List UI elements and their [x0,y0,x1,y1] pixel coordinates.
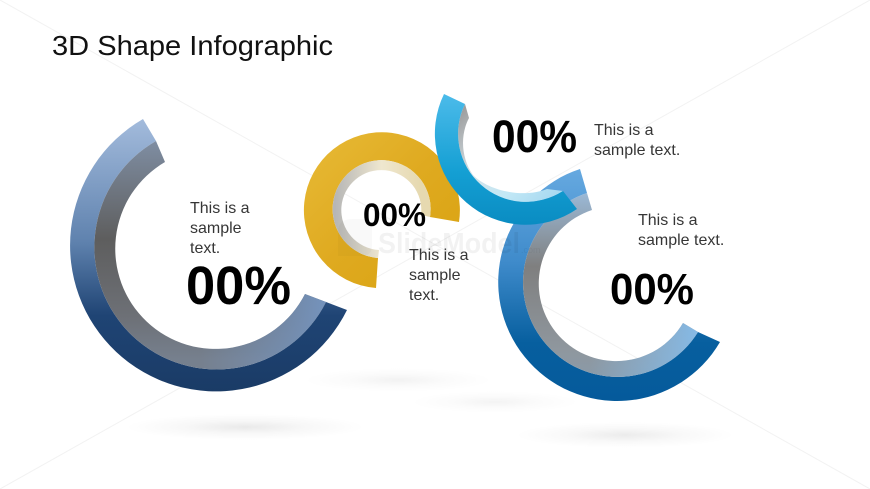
text block: cyan ring: This is a [594,122,654,139]
text block: navy ring: This is a [190,200,250,217]
cyan ring front face [435,94,577,225]
text block: blue ring [610,212,724,314]
panel: navy ring [70,119,347,391]
gold ring front face [304,132,460,288]
watermark [338,219,541,260]
title: 3D Shape Infographic [52,30,333,61]
text block: navy ring [186,200,291,316]
panel: cyan ring [435,94,577,225]
text block: blue ring: 00% [610,265,694,314]
cyan ring inner face [458,104,563,202]
watermark: SlideModel [378,228,520,260]
text block: gold ring: sample [409,267,461,284]
blue ring front face [498,169,720,401]
watermark: .com [521,245,541,255]
navy ring front face [70,119,347,391]
blue ring inner face [523,193,698,377]
text block: navy ring: sample [190,220,242,237]
text block: blue ring: sample text. [638,232,724,249]
gold ring inner face [333,160,431,258]
text block: gold ring: text. [409,287,439,304]
text block: blue ring: This is a [638,212,698,229]
text block: gold ring: 00% [363,197,426,233]
navy ring inner face [94,141,326,369]
text block: cyan ring: sample text. [594,142,680,159]
text block: cyan ring [492,111,680,162]
text block: navy ring: text. [190,240,220,257]
panel: blue ring [498,169,720,401]
text block: gold ring [363,197,469,304]
ground shadows [125,368,735,448]
text block: cyan ring: 00% [492,111,577,162]
panel: gold ring [304,132,460,288]
text block: navy ring: 00% [186,256,291,316]
text block: gold ring: This is a [409,247,469,264]
